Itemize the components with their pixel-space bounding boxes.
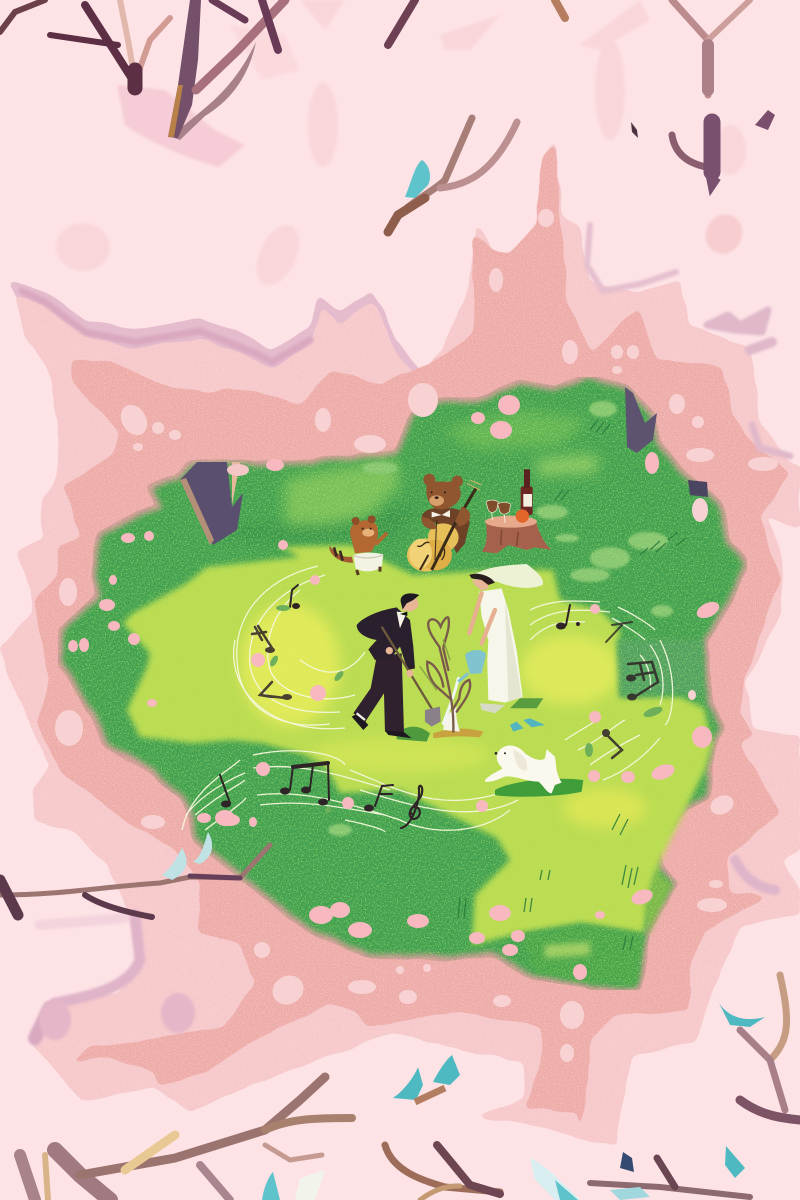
icon: patches top right (631, 110, 775, 138)
sunlit stripes upper grass (220, 410, 597, 540)
icon: note bottom left (220, 775, 231, 808)
pale oval patches in grass (328, 401, 673, 836)
icon: note lower right (602, 729, 622, 758)
icon: beamed note right (626, 662, 658, 700)
icon: top left branches (0, 0, 565, 140)
panel: grassy clearing (58, 377, 747, 990)
icon: note left (252, 626, 275, 653)
green leaves among notes (268, 605, 664, 813)
icon: note right top (556, 605, 580, 630)
clearing base green (58, 377, 747, 990)
canopy rim: mauve shadow under the top canopy (8, 280, 420, 390)
petals on grass and hole rim (68, 395, 722, 980)
icon: tree stump table with wine (482, 469, 552, 553)
icon: bear playing double bass (407, 474, 482, 572)
icon: groom with shovel (352, 593, 441, 738)
icon: treble clef (401, 786, 422, 828)
bright yellow glade patches (240, 603, 647, 828)
icon: central upper twig with blue bird (388, 118, 517, 232)
icon: bride with watering can (458, 564, 545, 732)
icon: left tree trunk in clearing (180, 462, 249, 545)
canopy rim: mauve accents (22, 225, 790, 1040)
petals on salmon band (55, 209, 778, 1062)
icon: bottom left branches (20, 1077, 352, 1200)
teal-green patch behind right notes (617, 640, 703, 698)
icon: top right branches (672, 0, 750, 195)
music notes (220, 585, 664, 828)
icon: beamed triple note (280, 763, 329, 806)
icon: note bottom center (364, 785, 393, 812)
icon: sapling with heart top (397, 617, 483, 742)
icon: bottom right branches (740, 975, 800, 1120)
icon: blue leaves and birds (262, 997, 765, 1200)
grass tufts (458, 420, 686, 950)
icon: raccoon drummer (329, 515, 386, 575)
icon: white dog (485, 745, 583, 797)
icon: note lower left (260, 682, 292, 700)
icon: bottom center branches (385, 1145, 750, 1200)
music staff lines (182, 566, 673, 832)
icon: left branch with birds (0, 832, 270, 917)
panel: salmon shade around clearing (33, 143, 790, 1133)
main glade yellow-green (123, 545, 712, 945)
icon: note upper left (290, 585, 300, 609)
icon: right tree trunk in clearing (625, 387, 708, 497)
icon: note right second (606, 622, 632, 642)
lower right grass (520, 870, 672, 985)
shadow patches on canopy (39, 0, 749, 1040)
